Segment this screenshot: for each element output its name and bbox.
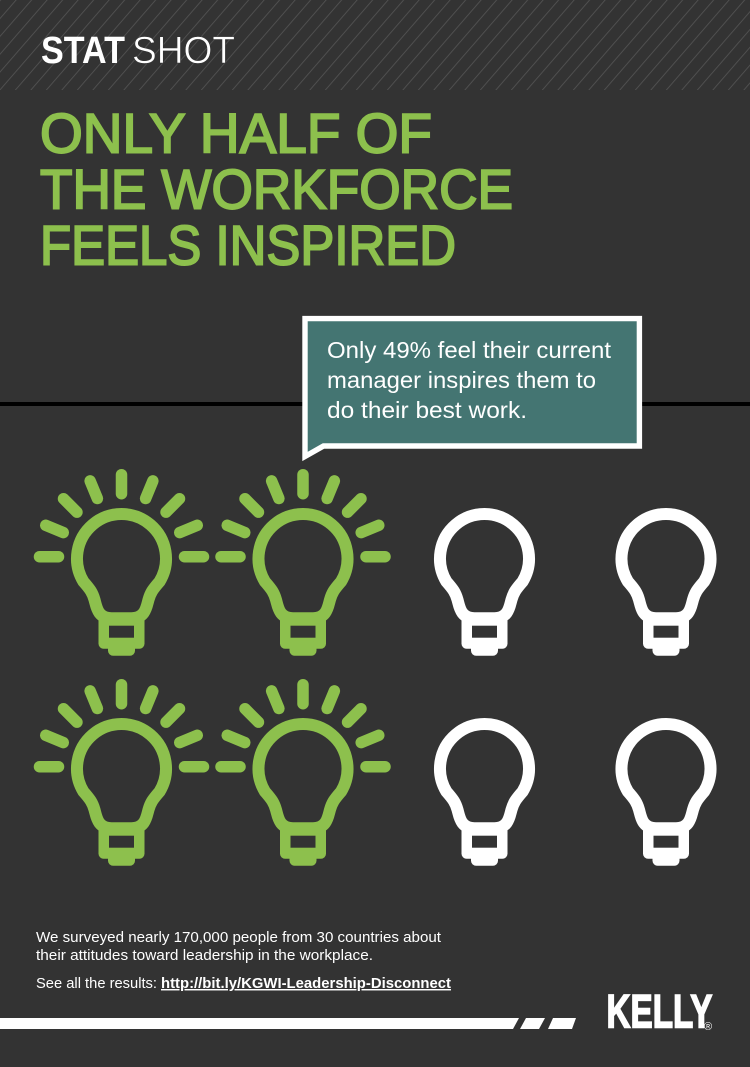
logo: Kelly: ®	[704, 1021, 712, 1033]
heading: StatShot: SHOT	[132, 30, 235, 72]
icon: unlit bulb row 2 column 3	[440, 724, 529, 866]
icon: lit bulb row 1 column 2	[221, 475, 385, 656]
title: THE WORKFORCE	[40, 158, 513, 220]
icon: lit bulb row 1 column 1	[40, 475, 204, 656]
callout: manager inspires them to	[327, 367, 596, 393]
heading: StatShot: STAT	[41, 30, 125, 72]
title: ONLY HALF OF	[40, 102, 432, 164]
footer text: their attitudes toward leadership in the workplace.	[36, 948, 373, 964]
heading: StatShot	[41, 30, 235, 72]
icon: unlit bulb row 1 column 4	[622, 514, 710, 656]
icon: unlit bulb row 1 column 3	[440, 514, 529, 656]
footer bar	[0, 1018, 576, 1029]
footer text	[36, 930, 451, 992]
footer text: http://bit.ly/KGWI-Leadership-Disconnect	[161, 976, 451, 992]
footer text: We surveyed nearly 170,000 people from 30 countries about	[36, 930, 441, 946]
icon: lit bulb row 2 column 2	[221, 685, 385, 866]
icon: lit bulb row 2 column 1	[40, 685, 204, 866]
callout: do their best work.	[327, 397, 527, 423]
callout: Only 49% feel their current	[327, 337, 612, 363]
callout	[305, 319, 639, 456]
title	[40, 102, 513, 276]
icon: unlit bulb row 2 column 4	[622, 724, 710, 866]
title: FEELS INSPIRED	[40, 214, 456, 276]
footer text: See all the results:	[36, 976, 157, 992]
